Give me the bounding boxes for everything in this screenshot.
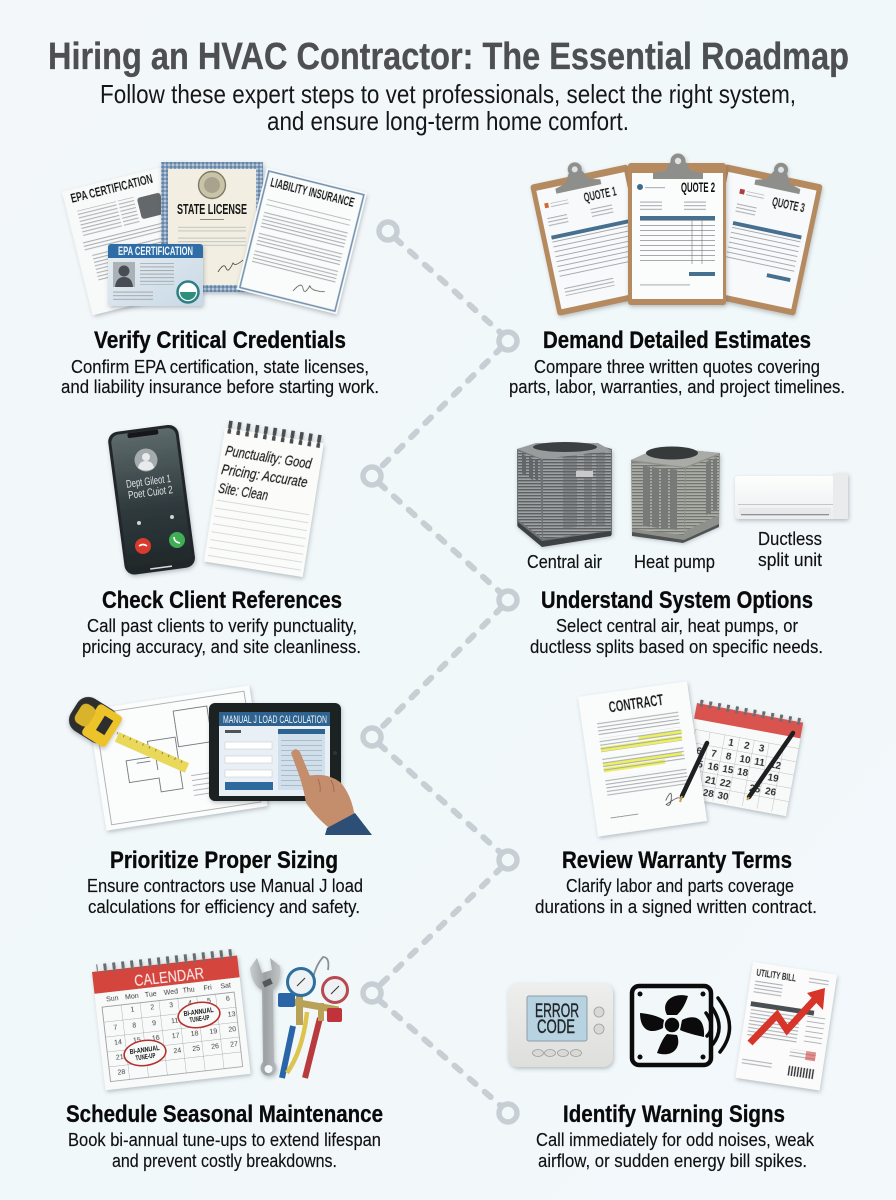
illustration: contract calendar and pens: 11	[753, 757, 766, 769]
illustration: calendar and HVAC tools: Sat	[220, 982, 231, 991]
illustration: three quote clipboards: QUOTE 2	[681, 180, 715, 195]
heading: Verify Critical Credentials	[94, 327, 346, 354]
illustration: calendar and HVAC tools: 27	[230, 1041, 238, 1049]
illustration: contract calendar and pens: 19	[767, 772, 780, 785]
illustration: thermostat error code: ERROR	[535, 1001, 579, 1022]
illustration: contract calendar and pens: 15	[691, 758, 704, 771]
description	[535, 876, 817, 917]
description: and liability insurance before starting work.	[61, 377, 379, 397]
illustration: credential documents: EPA CERTIFICATION	[118, 246, 193, 258]
panel: prioritize proper sizing	[64, 685, 372, 917]
illustration: contract calendar and pens: 27	[686, 785, 699, 798]
illustration: calendar and HVAC tools: 18	[190, 1030, 199, 1038]
illustration: calendar and HVAC tools: BI-ANNUAL	[129, 1045, 161, 1056]
illustration: contract calendar and pens: 8	[725, 751, 733, 763]
illustration: phone and notepad: Dept Gileot 1	[125, 473, 172, 491]
illustration: contract calendar and pens: 30	[716, 790, 730, 803]
illustration: phone and notepad	[107, 420, 325, 577]
illustration: calendar and HVAC tools: 28	[117, 1069, 126, 1077]
icon: noisy fan	[632, 986, 730, 1065]
illustration: contract calendar and pens: CONTRACT	[608, 692, 665, 717]
label: Central air	[527, 552, 602, 572]
description: Compare three written quotes covering	[534, 357, 820, 377]
description: and prevent costly breakdowns.	[112, 1151, 337, 1171]
illustration: calendar and HVAC tools: Fri	[203, 985, 213, 992]
description: Select central air, heat pumps, or	[556, 616, 798, 636]
illustration: calendar and HVAC tools: Thu	[182, 986, 195, 995]
illustration: calendar and HVAC tools: CALENDAR	[133, 965, 205, 990]
description: parts, labor, warranties, and project timelines.	[509, 377, 845, 397]
description	[530, 616, 823, 657]
description: Call past clients to verify punctuality,	[87, 616, 357, 636]
illustration: calendar and HVAC tools: 15	[133, 1037, 141, 1045]
illustration: contract calendar and pens: 7	[710, 748, 718, 760]
illustration: contract calendar and pens: 20	[688, 772, 702, 785]
illustration: contract calendar and pens: 16	[707, 761, 720, 774]
illustration: utility bill with rising arrow: UTILITY BILL	[756, 967, 797, 985]
description: Ensure contractors use Manual J load	[87, 876, 363, 896]
subtitle: Follow these expert steps to vet professionals, select the right system,	[100, 79, 796, 109]
description	[536, 1130, 815, 1171]
description	[87, 876, 363, 917]
illustration: calendar and HVAC tools	[91, 949, 348, 1090]
heading: Check Client References	[102, 587, 342, 614]
illustration: phone and notepad: Site: Clean	[217, 480, 269, 504]
description: airflow, or sudden energy bill spikes.	[538, 1151, 807, 1171]
illustration: blueprint tape measure and tablet	[64, 685, 372, 835]
illustration: calendar and HVAC tools: 16	[152, 1035, 160, 1043]
illustration: phone and notepad: Pricing: Accurate	[220, 461, 309, 491]
illustration: contract calendar and pens: 21	[704, 775, 717, 788]
label: Ductless	[758, 529, 822, 549]
illustration: contract calendar and pens: 2	[743, 740, 751, 752]
subtitle: and ensure long-term home comfort.	[267, 106, 629, 136]
illustration: credential documents: STATE LICENSE	[177, 202, 247, 218]
description: Book bi-annual tune-ups to extend lifespan	[68, 1130, 381, 1150]
label: split unit	[758, 550, 822, 570]
illustration: phone and notepad: Punctuality: Good	[224, 442, 313, 473]
description: ductless splits based on specific needs.	[530, 637, 823, 657]
label: Heat pump	[634, 552, 715, 572]
illustration: calendar and HVAC tools: 14	[114, 1039, 122, 1047]
illustration: calendar and HVAC tools: 4	[188, 1000, 193, 1007]
illustration: contract calendar and pens: 26	[764, 786, 777, 799]
description: Confirm EPA certification, state licenses,	[71, 357, 369, 377]
illustration: calendar and HVAC tools: BI-ANNUAL	[183, 1007, 215, 1018]
illustration: calendar and HVAC tools: 7	[113, 1024, 118, 1032]
illustration: ductless split unit	[735, 473, 848, 519]
panel: demand detailed estimates	[509, 151, 845, 397]
illustration: calendar and HVAC tools: 1	[130, 1006, 135, 1014]
illustration: credential documents: LIABILITY INSURANCE	[269, 175, 356, 210]
roadmap connector path	[363, 222, 517, 1122]
illustration: calendar and HVAC tools: Mon	[125, 993, 139, 1001]
illustration: calendar and HVAC tools: 21	[116, 1054, 124, 1062]
description: pricing accuracy, and site cleanliness.	[82, 637, 361, 657]
illustration: contract calendar and pens: 28	[702, 788, 715, 801]
illustration: calendar and HVAC tools: 8	[132, 1022, 137, 1030]
description	[509, 357, 845, 397]
illustration: phone and notepad: Poet Cuiot 2	[127, 484, 174, 502]
illustration: credential documents: EPA CERTIFICATION	[69, 171, 154, 206]
illustration: central air unit	[517, 442, 612, 547]
illustration: heat pump unit	[631, 446, 720, 543]
illustration: calendar and HVAC tools: 25	[192, 1045, 201, 1053]
heading: Review Warranty Terms	[562, 847, 792, 874]
heading: Understand System Options	[541, 587, 813, 614]
illustration: calendar and HVAC tools: 24	[173, 1047, 182, 1055]
illustration: calendar and HVAC tools: 11	[171, 1018, 179, 1025]
description: Clarify labor and parts coverage	[566, 876, 794, 896]
illustration: calendar and HVAC tools: 26	[211, 1043, 220, 1051]
panel: identify warning signs	[508, 962, 837, 1171]
illustration: three quote clipboards	[527, 151, 826, 316]
illustration: calendar and HVAC tools: 3	[169, 1002, 174, 1009]
description	[68, 1130, 381, 1171]
illustration: calendar and HVAC tools: 9	[152, 1020, 157, 1027]
illustration: contract calendar and pens: 6	[695, 746, 703, 758]
illustration: credential documents	[62, 162, 367, 315]
description: Call immediately for odd noises, weak	[536, 1130, 815, 1150]
illustration: contract calendar and pens	[578, 681, 804, 837]
illustration: contract calendar and pens: 25	[748, 783, 762, 796]
label	[758, 529, 822, 570]
illustration: calendar and HVAC tools: TUNE-UP	[135, 1053, 156, 1062]
illustration: contract calendar and pens: 18	[736, 767, 749, 779]
illustration: three quote clipboards: QUOTE 3	[771, 194, 806, 215]
description: durations in a signed written contract.	[535, 897, 817, 917]
heading: Schedule Seasonal Maintenance	[66, 1101, 383, 1128]
illustration: calendar and HVAC tools: 17	[171, 1033, 180, 1040]
illustration: three quote clipboards: QUOTE 1	[582, 183, 618, 205]
illustration: calendar and HVAC tools: TUNE-UP	[189, 1015, 210, 1024]
illustration: calendar and HVAC tools: Tue	[145, 991, 157, 999]
illustration: thermostat error code: CODE	[537, 1017, 575, 1038]
illustration: contract calendar and pens: 3	[758, 743, 766, 755]
illustration: calendar and HVAC tools: 19	[209, 1028, 218, 1036]
illustration: contract calendar and pens: 22	[719, 778, 732, 791]
illustration: contract calendar and pens: 15	[721, 764, 735, 777]
illustration: contract calendar and pens: 1	[727, 737, 735, 749]
illustration: calendar and HVAC tools: 13	[227, 1011, 236, 1019]
illustration: utility bill with rising arrow	[736, 962, 837, 1090]
description: calculations for efficiency and safety.	[88, 897, 360, 917]
illustration: contract calendar and pens: 12	[769, 759, 782, 772]
panel: review warranty terms	[535, 681, 817, 917]
heading: Prioritize Proper Sizing	[110, 847, 338, 874]
illustration: calendar and HVAC tools: 20	[228, 1026, 237, 1034]
panel: schedule seasonal maintenance	[66, 949, 383, 1171]
illustration: thermostat error code	[508, 983, 613, 1067]
panel: check client references	[82, 420, 361, 657]
panel: understand system options	[517, 442, 848, 657]
heading: Identify Warning Signs	[563, 1101, 785, 1128]
description	[82, 616, 361, 657]
illustration: blueprint tape measure and tablet: MANUAL J LOAD CALCULATION	[223, 714, 327, 726]
illustration: calendar and HVAC tools: Wed	[163, 988, 179, 997]
heading: Demand Detailed Estimates	[543, 327, 811, 354]
illustration: calendar and HVAC tools: 5	[207, 998, 211, 1005]
illustration: contract calendar and pens: 10	[738, 754, 752, 767]
illustration: calendar and HVAC tools: 6	[226, 996, 230, 1003]
illustration: calendar and HVAC tools: Sun	[106, 995, 119, 1004]
panel: verify critical credentials	[61, 162, 379, 397]
illustration: calendar and HVAC tools: 2	[150, 1004, 155, 1012]
description	[61, 357, 379, 397]
subtitle	[100, 79, 796, 136]
